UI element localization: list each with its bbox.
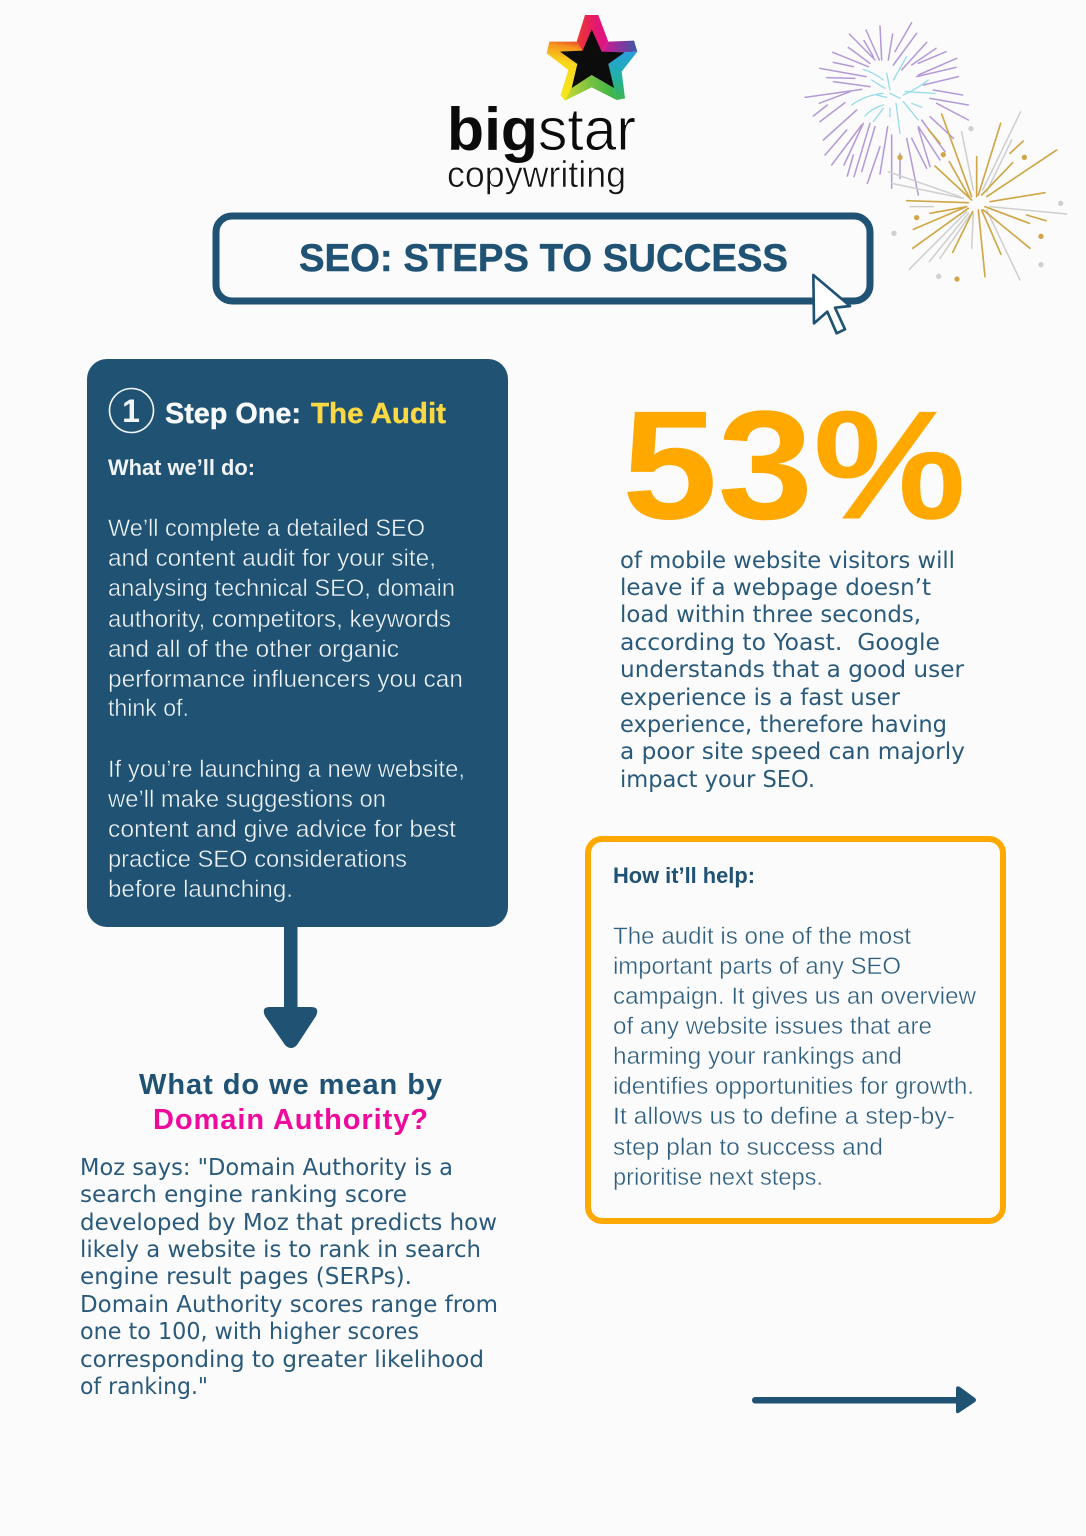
panel frame [588, 839, 1003, 1221]
big statistic 53%: 53% [622, 378, 966, 552]
text block: statistic explanation: understands that a good user [620, 657, 965, 683]
text block: moz definition: of ranking." [80, 1374, 208, 1400]
what we'll do body text: we’ll make suggestions on [107, 786, 386, 813]
icon: rainbow star [547, 15, 637, 101]
step heading: The Audit [311, 398, 446, 430]
purple firework [805, 23, 968, 195]
logo wordmark: star [538, 96, 636, 163]
text block: moz definition: Moz says: "Domain Authority is a [80, 1155, 453, 1181]
arrow: down to domain authority [264, 926, 317, 1048]
text block: statistic explanation: a poor site speed can majorly [620, 739, 965, 765]
gold dots [897, 152, 1044, 282]
silver firework rays [888, 112, 1067, 280]
panel body text: step plan to success and [613, 1134, 883, 1161]
heading: domain authority: Domain Authority? [153, 1104, 428, 1136]
text block: moz definition [80, 1155, 498, 1400]
panel body text: identifies opportunities for growth. [613, 1073, 974, 1100]
panel body text: important parts of any SEO [613, 953, 901, 980]
what we'll do body text: think of. [108, 695, 189, 722]
silver dots [891, 126, 1063, 279]
panel body text: harming your rankings and [613, 1043, 902, 1070]
what we'll do body text: We’ll complete a detailed SEO [108, 515, 425, 542]
text block: moz definition: Domain Authority scores range from [80, 1292, 498, 1318]
logo wordmark: big [447, 96, 538, 163]
text block: statistic explanation: load within three seconds, [620, 602, 921, 628]
text block: moz definition: developed by Moz that predicts how [80, 1210, 497, 1236]
panel body text: prioritise next steps. [613, 1164, 823, 1191]
what we'll do body text: before launching. [108, 876, 293, 903]
what we'll do body text: analysing technical SEO, domain [108, 575, 455, 602]
title: SEO: STEPS TO SUCCESS [299, 237, 788, 280]
what we'll do body text: and all of the other organic [108, 636, 399, 663]
icon: mouse cursor [813, 275, 850, 333]
text block: moz definition: corresponding to greater likelihood [80, 1347, 484, 1373]
panel background [87, 359, 508, 927]
what we'll do body text: authority, competitors, keywords [108, 606, 451, 633]
step number badge [110, 388, 154, 432]
text block: statistic explanation: impact your SEO. [620, 767, 815, 793]
panel body text: campaign. It gives us an overview [613, 983, 976, 1010]
what we'll do body text: practice SEO considerations [108, 846, 407, 873]
logo: bigstar copywriting [447, 15, 637, 195]
logo subline: copywriting [447, 154, 626, 195]
text block: statistic explanation: experience is a fast user [620, 685, 901, 711]
what we'll do body text: content and give advice for best [108, 816, 456, 843]
title box [216, 216, 870, 333]
what we'll do body text: and content audit for your site, [108, 545, 436, 572]
heading: domain authority [139, 1069, 442, 1136]
text block: statistic explanation: according to Yoast. Google [620, 630, 940, 656]
text block: statistic explanation [620, 548, 965, 793]
text block: moz definition: likely a website is to rank in search [80, 1237, 481, 1263]
logo wordmark [447, 96, 636, 163]
text block: statistic explanation: of mobile website visitors will [620, 548, 955, 574]
panel body text: It allows us to define a step-by- [613, 1103, 955, 1130]
step number badge: 1 [122, 393, 140, 429]
text block: moz definition: one to 100, with higher scores [80, 1319, 419, 1345]
panel: step one the audit [87, 359, 508, 927]
arrow: next page [752, 1386, 976, 1413]
heading: domain authority: What do we mean by [139, 1069, 442, 1101]
title frame [216, 216, 870, 301]
panel heading: How it’ll help: [613, 863, 755, 888]
panel: how it'll help [588, 839, 1003, 1221]
text block: moz definition: engine result pages (SERPs). [80, 1264, 412, 1290]
fireworks [805, 23, 1067, 282]
what we'll do body text: performance influencers you can [108, 666, 463, 693]
step heading: Step One: [165, 398, 301, 430]
panel body text: The audit is one of the most [613, 923, 911, 950]
what we'll do body text [107, 515, 465, 903]
text block: moz definition: search engine ranking score [80, 1182, 407, 1208]
panel body text [613, 923, 976, 1191]
cyan centre of firework [852, 57, 935, 133]
what we'll do label: What we’ll do: [108, 455, 255, 480]
text block: statistic explanation: experience, therefore having [620, 712, 947, 738]
text block: statistic explanation: leave if a webpage doesn’t [620, 575, 931, 601]
panel body text: of any website issues that are [613, 1013, 932, 1040]
what we'll do body text: If you’re launching a new website, [108, 756, 465, 783]
gold firework rays [907, 114, 1057, 277]
